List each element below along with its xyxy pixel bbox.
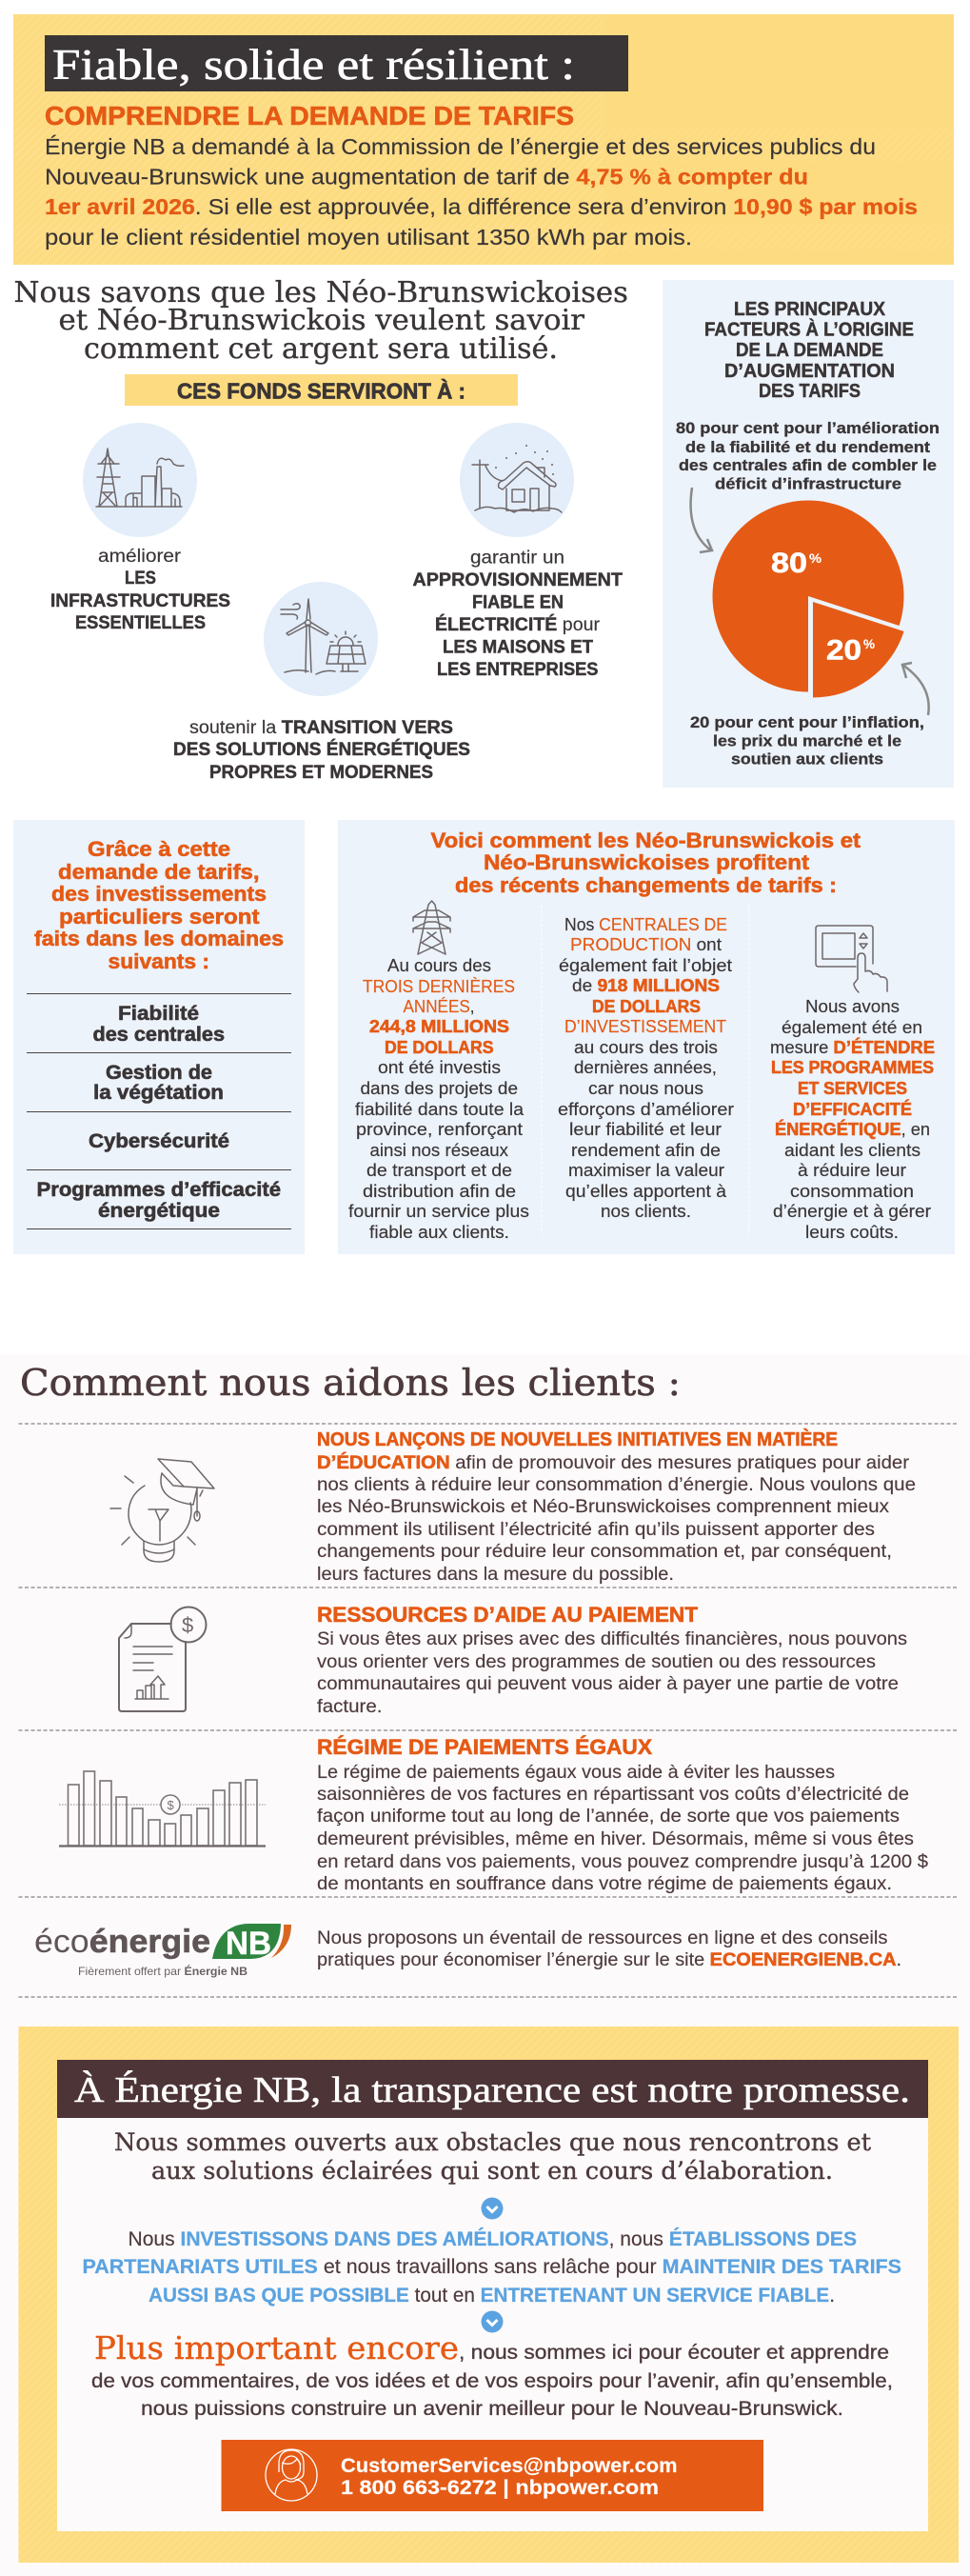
pie chart: 80 / 20 <box>713 500 904 697</box>
icon: light bulb with graduation cap <box>110 1459 214 1562</box>
intro text: Énergie NB a demandé à la Commission de l’énergie et des services publics du <box>45 134 876 159</box>
panel heading: faits dans les domaines <box>34 927 284 950</box>
column: efficiency programs: Nous avons <box>805 997 900 1016</box>
panel heading: Voici comment les Néo-Brunswickois et <box>430 829 861 852</box>
block: payment assistance: vous orienter vers des programmes de soutien ou des ressources <box>317 1651 876 1672</box>
panel: main drivers pie chart <box>663 280 954 788</box>
label: 20 percent: 20 pour cent pour l’inflation, <box>690 714 924 731</box>
block: online resources: pratiques pour économiser l’énergie sur le site ECOENERGIENB.CA. <box>317 1949 901 1970</box>
intro text: 1er avril 2026 . Si elle est approuvée, la différence sera d’environ 10,90 $ par mois <box>45 194 918 219</box>
icon: bill with dollar: $ <box>182 1613 193 1637</box>
panel: benefits of recent rate changes <box>338 820 955 1254</box>
statement: listening: , nous sommes ici pour écouter et apprendre <box>459 2341 889 2364</box>
statement: listening: nous puissions construire un avenir meilleur pour le Nouveau-Brunswick. <box>141 2397 843 2420</box>
title bar: Fiable, solide et résilient : <box>52 40 575 89</box>
block: payment assistance: RESSOURCES D’AIDE AU PAIEMENT <box>317 1603 699 1627</box>
panel heading: suivants : <box>109 949 209 973</box>
block: education initiatives: changements pour réduire leur consommation et, par conséquent, <box>317 1541 892 1562</box>
logo: ecoenergie NB: Fièrement offert par Énergie NB <box>78 1964 247 1978</box>
column: transmission investments: Au cours des <box>387 956 491 975</box>
text: infrastructures: ESSENTIELLES <box>75 613 206 633</box>
column: efficiency programs: d’énergie et à gérer <box>773 1202 931 1221</box>
text: infrastructures: LES <box>125 569 156 589</box>
icon: chevron down <box>482 2198 503 2219</box>
column: generating stations: qu’elles apportent à <box>565 1182 727 1201</box>
list of domains: Gestion de <box>106 1062 212 1084</box>
column: efficiency programs: également été en <box>782 1018 922 1037</box>
block: payment assistance: facture. <box>317 1696 383 1717</box>
column: transmission investments: province, renforçant <box>356 1120 523 1139</box>
intro text: Nouveau-Brunswick une augmentation de tarif de 4,75 % à compter du <box>45 164 808 189</box>
column: generating stations: maximiser la valeur <box>568 1161 724 1180</box>
column: efficiency programs: mesure D’ÉTENDRE <box>770 1037 935 1057</box>
column: transmission investments: 244,8 MILLIONS <box>369 1017 509 1036</box>
column: transmission investments: DE DOLLARS <box>385 1038 493 1057</box>
icon: chevron down <box>482 2310 503 2333</box>
panel heading <box>704 298 914 402</box>
icon: transmission tower <box>413 901 450 954</box>
text: reliable supply: APPROVISIONNEMENT <box>413 570 623 590</box>
block: education initiatives <box>317 1428 916 1585</box>
list of domains: énergétique <box>98 1200 220 1222</box>
statement: open about obstacles <box>114 2128 871 2185</box>
column: transmission investments: distribution afin de <box>363 1182 516 1201</box>
panel: investment domains <box>13 820 305 1254</box>
banner: ces fonds serviront: CES FONDS SERVIRONT À : <box>177 377 465 404</box>
list of domains: la végétation <box>93 1082 224 1104</box>
label: 20 percent <box>690 714 924 768</box>
pie chart: 80 / 20: 80 <box>771 548 807 579</box>
icon: tower and power plant <box>83 423 197 537</box>
statement: investing <box>82 2227 901 2306</box>
column: efficiency programs: consommation <box>790 1182 914 1201</box>
heading: how money is used <box>13 276 628 366</box>
text: energy transition: soutenir la TRANSITION VERS <box>189 718 453 738</box>
panel heading: des récents changements de tarifs : <box>455 873 837 897</box>
contact box <box>221 2440 763 2511</box>
block: equal payment plan: Le régime de paiements égaux vous aide à éviter les hausses <box>317 1762 835 1783</box>
block: online resources <box>317 1927 901 1970</box>
icon: snowy house <box>460 423 574 537</box>
logo: ecoenergie NB: écoénergie <box>34 1924 210 1960</box>
panel heading: D’AUGMENTATION <box>724 360 895 382</box>
column: transmission investments: fiabilité dans toute la <box>355 1100 525 1119</box>
column: generating stations: efforçons d’améliorer <box>558 1100 734 1119</box>
list of domains: des centrales <box>93 1024 225 1046</box>
logo: ecoenergie NB: NB <box>226 1926 271 1962</box>
heading: how money is used: comment cet argent sera utilisé. <box>84 332 558 366</box>
panel: header <box>13 14 954 265</box>
label: 80 percent: de la fiabilité et du rendement <box>685 439 931 456</box>
block: payment assistance <box>317 1603 907 1717</box>
label: 20 percent: soutien aux clients <box>731 750 883 768</box>
block: equal payment plan: RÉGIME DE PAIEMENTS ÉGAUX <box>317 1735 652 1759</box>
text: infrastructures <box>50 547 230 633</box>
panel heading <box>430 829 861 897</box>
block: equal payment plan: en retard dans vos paiements, vous pouvez comprendre jusqu’à 1200 $ <box>317 1851 928 1872</box>
contact details: 1 800 663-6272 | nbpower.com <box>341 2477 659 2499</box>
block: payment assistance: Si vous êtes aux prises avec des difficultés financières, nous pouvons <box>317 1628 907 1649</box>
list of domains: Programmes d’efficacité <box>36 1179 281 1201</box>
label: 80 percent: 80 pour cent pour l’amélioration <box>676 420 940 437</box>
column: generating stations: dernières années, <box>574 1058 717 1077</box>
column: transmission investments: ANNÉES, <box>404 997 474 1016</box>
statement: investing: PARTENARIATS UTILES et nous travaillons sans relâche pour MAINTENIR DES TARIFS <box>82 2255 901 2278</box>
column: efficiency programs: leurs coûts. <box>805 1223 899 1242</box>
list of domains <box>36 1003 281 1222</box>
column: generating stations: DE DOLLARS <box>592 997 701 1016</box>
block: education initiatives: leurs factures dans la mesure du possible. <box>317 1564 674 1585</box>
block: equal payment plan: façon uniforme tout au long de l’année, de sorte que vos paiements <box>317 1806 900 1827</box>
panel heading <box>34 837 284 973</box>
column: generating stations: rendement afin de <box>571 1141 721 1160</box>
panel heading: demande de tarifs, <box>58 860 259 884</box>
column: transmission investments: TROIS DERNIÈRES <box>363 977 515 996</box>
panel heading: des investissements <box>51 882 267 906</box>
block: education initiatives: NOUS LANÇONS DE NOUVELLES INITIATIVES EN MATIÈRE <box>317 1428 838 1450</box>
panel heading: LES PRINCIPAUX <box>734 298 885 320</box>
panel heading: DE LA DEMANDE <box>736 339 883 361</box>
text: reliable supply: LES ENTREPRISES <box>437 660 598 680</box>
statement: investing: Nous INVESTISSONS DANS DES AMÉLIORATIONS, nous ÉTABLISSONS DES <box>128 2227 857 2250</box>
statement: listening: Plus important encore <box>94 2329 459 2366</box>
heading: how money is used: et Néo-Brunswickois veulent savoir <box>59 304 585 337</box>
subtitle: COMPRENDRE LA DEMANDE DE TARIFS <box>45 101 574 130</box>
list of domains: Cybersécurité <box>89 1130 229 1152</box>
column: efficiency programs: ÉNERGÉTIQUE, en <box>775 1119 930 1139</box>
block: online resources: Nous proposons un éventail de ressources en ligne et des conseils <box>317 1927 888 1948</box>
contact details: CustomerServices@nbpower.com <box>341 2455 678 2477</box>
panel heading: particuliers seront <box>59 905 260 929</box>
block: equal payment plan <box>317 1735 928 1894</box>
panel: transparency promise <box>19 2027 959 2563</box>
column: generating stations: car nous nous <box>588 1079 703 1098</box>
column: transmission investments: fiable aux clients. <box>369 1223 509 1242</box>
text: reliable supply: LES MAISONS ET <box>443 638 593 657</box>
label: 80 percent: déficit d’infrastructure <box>715 476 901 493</box>
text: energy transition: DES SOLUTIONS ÉNERGÉTIQUES <box>173 739 470 760</box>
label: 80 percent <box>676 420 940 493</box>
arrow: to 80 percent slice <box>691 488 712 552</box>
title bar: À Énergie NB, la transparence est notre promesse. <box>74 2070 910 2110</box>
text: infrastructures: améliorer <box>98 547 182 567</box>
icon: customer service agent <box>266 2449 317 2501</box>
pie chart: 80 / 20: % <box>863 636 876 651</box>
column: efficiency programs: LES PROGRAMMES <box>771 1058 934 1077</box>
column: generating stations: également fait l’objet <box>559 956 732 975</box>
text: energy transition: PROPRES ET MODERNES <box>209 763 433 783</box>
pie chart: 80 / 20: % <box>809 550 822 566</box>
block: equal payment plan: de montants en souffrance dans votre régime de paiements égaux. <box>317 1873 892 1894</box>
list of domains: Fiabilité <box>118 1003 199 1025</box>
column: efficiency programs: aidant les clients <box>784 1141 921 1160</box>
label: 80 percent: des centrales afin de combler le <box>679 457 937 474</box>
title bar <box>57 2060 928 2118</box>
icon: bill with dollar <box>119 1608 206 1711</box>
column: generating stations: leur fiabilité et leur <box>569 1120 722 1139</box>
column: efficiency programs: à réduire leur <box>798 1161 906 1180</box>
column: generating stations: nos clients. <box>601 1202 691 1221</box>
intro text <box>45 134 918 250</box>
banner: ces fonds serviront <box>125 374 518 406</box>
panel: how we help customers <box>0 1354 970 2576</box>
panel heading: Grâce à cette <box>88 837 230 861</box>
title bar <box>45 35 628 91</box>
text: reliable supply: FIABLE EN <box>472 592 564 613</box>
column: transmission investments: fournir un service plus <box>348 1202 529 1221</box>
column: generating stations: Nos CENTRALES DE <box>564 915 727 934</box>
block: education initiatives: D’ÉDUCATION afin de promouvoir des mesures pratiques pour aider <box>317 1451 910 1473</box>
column: efficiency programs: D’EFFICACITÉ <box>793 1099 912 1119</box>
text: energy transition <box>173 718 470 783</box>
block: education initiatives: comment ils utilisent l’électricité afin qu’ils puissent apporter des <box>317 1519 875 1540</box>
column: transmission investments: ainsi nos réseaux <box>369 1141 508 1160</box>
statement: investing: AUSSI BAS QUE POSSIBLE tout en ENTRETENANT UN SERVICE FIABLE. <box>148 2284 835 2306</box>
icon: wind turbine and solar panel <box>264 582 378 696</box>
text: infrastructures: INFRASTRUCTURES <box>50 591 230 611</box>
column: generating stations: de 918 MILLIONS <box>572 976 720 995</box>
heading: how money is used: Nous savons que les Néo-Brunswickoises <box>13 276 628 310</box>
column: transmission investments: de transport et de <box>366 1161 512 1180</box>
contact details <box>341 2455 678 2499</box>
arrow: to 20 percent slice <box>902 663 929 715</box>
text: reliable supply: garantir un <box>470 549 564 568</box>
column: efficiency programs: ET SERVICES <box>798 1079 907 1098</box>
column: transmission investments <box>348 956 529 1242</box>
block: equal payment plan: demeurent prévisibles, même en hiver. Désormais, même si vous êtes <box>317 1828 914 1849</box>
section heading: Comment nous aidons les clients : <box>20 1362 681 1404</box>
statement: listening: de vos commentaires, de vos idées et de vos espoirs pour l’avenir, afin qu’ensemble, <box>91 2369 893 2392</box>
column: generating stations: au cours des trois <box>574 1038 718 1057</box>
statement: listening <box>91 2329 893 2420</box>
statement: open about obstacles: Nous sommes ouverts aux obstacles que nous rencontrons et <box>114 2128 871 2156</box>
icon: equal payments bar chart: $ <box>168 1798 175 1812</box>
panel heading: Néo-Brunswickoises profitent <box>484 850 810 874</box>
pie chart: 80 / 20: 20 <box>826 634 861 667</box>
panel heading: DES TARIFS <box>759 380 861 402</box>
statement: open about obstacles: aux solutions éclairées qui sont en cours d’élaboration. <box>151 2157 833 2185</box>
text: reliable supply <box>413 549 623 680</box>
column: efficiency programs <box>770 997 935 1242</box>
block: education initiatives: nos clients à réduire leur consommation d’énergie. Nous voulons que <box>317 1474 916 1495</box>
panel heading: FACTEURS À L’ORIGINE <box>704 318 914 341</box>
block: education initiatives: les Néo-Brunswickois et Néo-Brunswickoises comprennent mieux <box>317 1496 889 1517</box>
text: reliable supply: ÉLECTRICITÉ pour <box>435 614 601 635</box>
column: transmission investments: dans des projets de <box>360 1079 518 1098</box>
block: payment assistance: communautaires qui peuvent vous aider à payer une partie de votre <box>317 1673 899 1694</box>
logo: ecoenergie NB <box>34 1924 291 1978</box>
icon: equal payments bar chart <box>59 1771 266 1846</box>
column: generating stations: PRODUCTION ont <box>570 935 722 954</box>
icon: thermostat with hand <box>816 926 887 992</box>
block: equal payment plan: saisonnières de vos factures en répartissant vos coûts d’électricité de <box>317 1784 909 1805</box>
intro text: pour le client résidentiel moyen utilisant 1350 kWh par mois. <box>45 225 692 250</box>
label: 20 percent: les prix du marché et le <box>713 733 901 750</box>
column: transmission investments: ont été investis <box>378 1058 501 1077</box>
column: generating stations <box>558 915 734 1221</box>
column: generating stations: D’INVESTISSEMENT <box>564 1017 726 1036</box>
